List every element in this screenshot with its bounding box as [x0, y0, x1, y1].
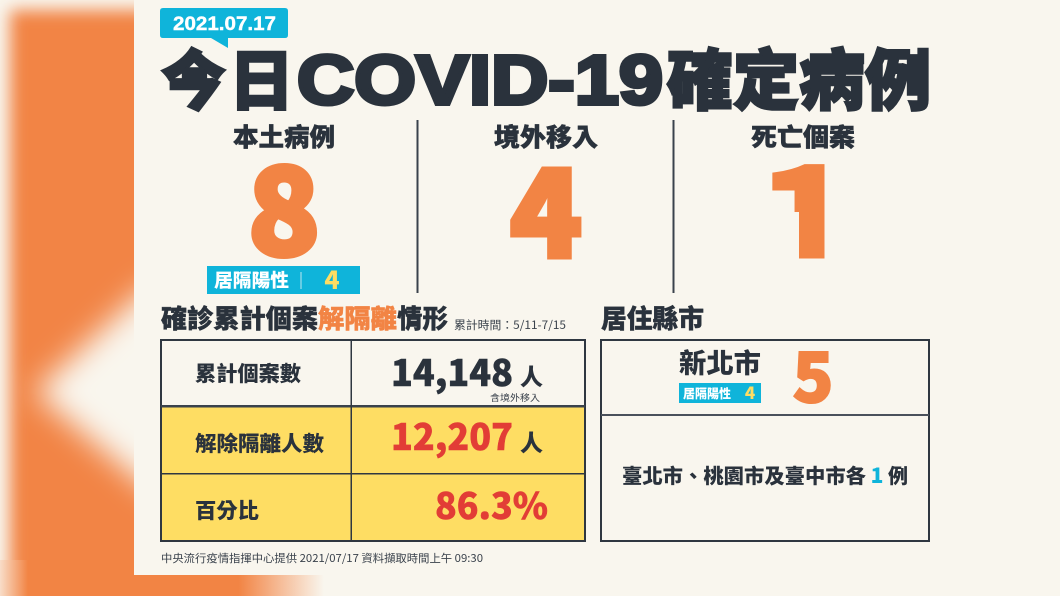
number: 5: 5 [793, 325, 833, 422]
title: 日 [229, 29, 294, 123]
footer source: 中央流行疫情指揮中心提供 2021/07/17 資料擷取時間上午 09:30 [161, 550, 483, 566]
divider right [672, 120, 674, 293]
row: released: 12,207 [391, 409, 513, 461]
row: cumulative total: 含境外移入 [490, 391, 540, 404]
row: cumulative total: 人 [520, 358, 543, 392]
row: cumulative total: 累計個案數 [195, 358, 301, 388]
number: 4: 4 [510, 120, 582, 291]
row: cumulative total: 14,148 [391, 345, 513, 397]
note: period: 累計時間：5/11-7/15 [454, 317, 566, 333]
panel: deaths [751, 124, 854, 258]
title: 今 [161, 29, 226, 123]
heading: imported cases: 境外移入 [494, 118, 598, 154]
row: percentage [195, 478, 548, 530]
row: released [195, 409, 543, 461]
other cities: 1 [871, 460, 883, 490]
row: released: 解除隔離人數 [195, 428, 324, 458]
title [161, 28, 931, 124]
number: 1: 1 [760, 118, 858, 291]
badge: quarantine positive 4: 居隔陽性 [214, 267, 289, 293]
date bubble [160, 8, 288, 48]
other cities: 例 [888, 460, 908, 489]
heading: release from isolation: 解隔離 [318, 299, 397, 336]
panel: local cases [207, 118, 360, 297]
title: 確定病例 [667, 28, 931, 124]
background: blurred orange shapes [0, 10, 324, 596]
title: COVID-19 [297, 41, 663, 119]
badge: quarantine positive 4 [207, 261, 360, 297]
badge: quarantine positive 4: 4 [745, 379, 755, 404]
panel: imported cases [494, 118, 598, 291]
row: cumulative total [195, 345, 543, 404]
date bubble: 2021.07.17 [173, 14, 276, 35]
table: cumulative cases [161, 340, 585, 541]
badge: quarantine positive 4 [679, 379, 761, 404]
heading: release from isolation [161, 299, 448, 336]
badge: quarantine positive 4: 4 [324, 261, 340, 297]
city: New Taipei: 新北市 [679, 342, 761, 381]
divider left [416, 120, 418, 293]
row: percentage: 86.3% [435, 478, 548, 530]
row: percentage: 百分比 [195, 495, 259, 525]
row: released: 人 [520, 424, 543, 458]
heading: release from isolation: 確診累計個案 [161, 299, 318, 336]
heading: release from isolation: 情形 [397, 299, 448, 336]
panel: residence [601, 325, 929, 541]
heading: deaths: 死亡個案 [751, 118, 855, 154]
heading: residence: 居住縣市 [601, 299, 704, 336]
number: 8: 8 [248, 118, 320, 289]
badge: quarantine positive 4: 居隔陽性 [683, 383, 731, 402]
heading: local cases: 本土病例 [233, 118, 335, 154]
other cities: 臺北市、桃園市及臺中市各 [622, 460, 866, 489]
